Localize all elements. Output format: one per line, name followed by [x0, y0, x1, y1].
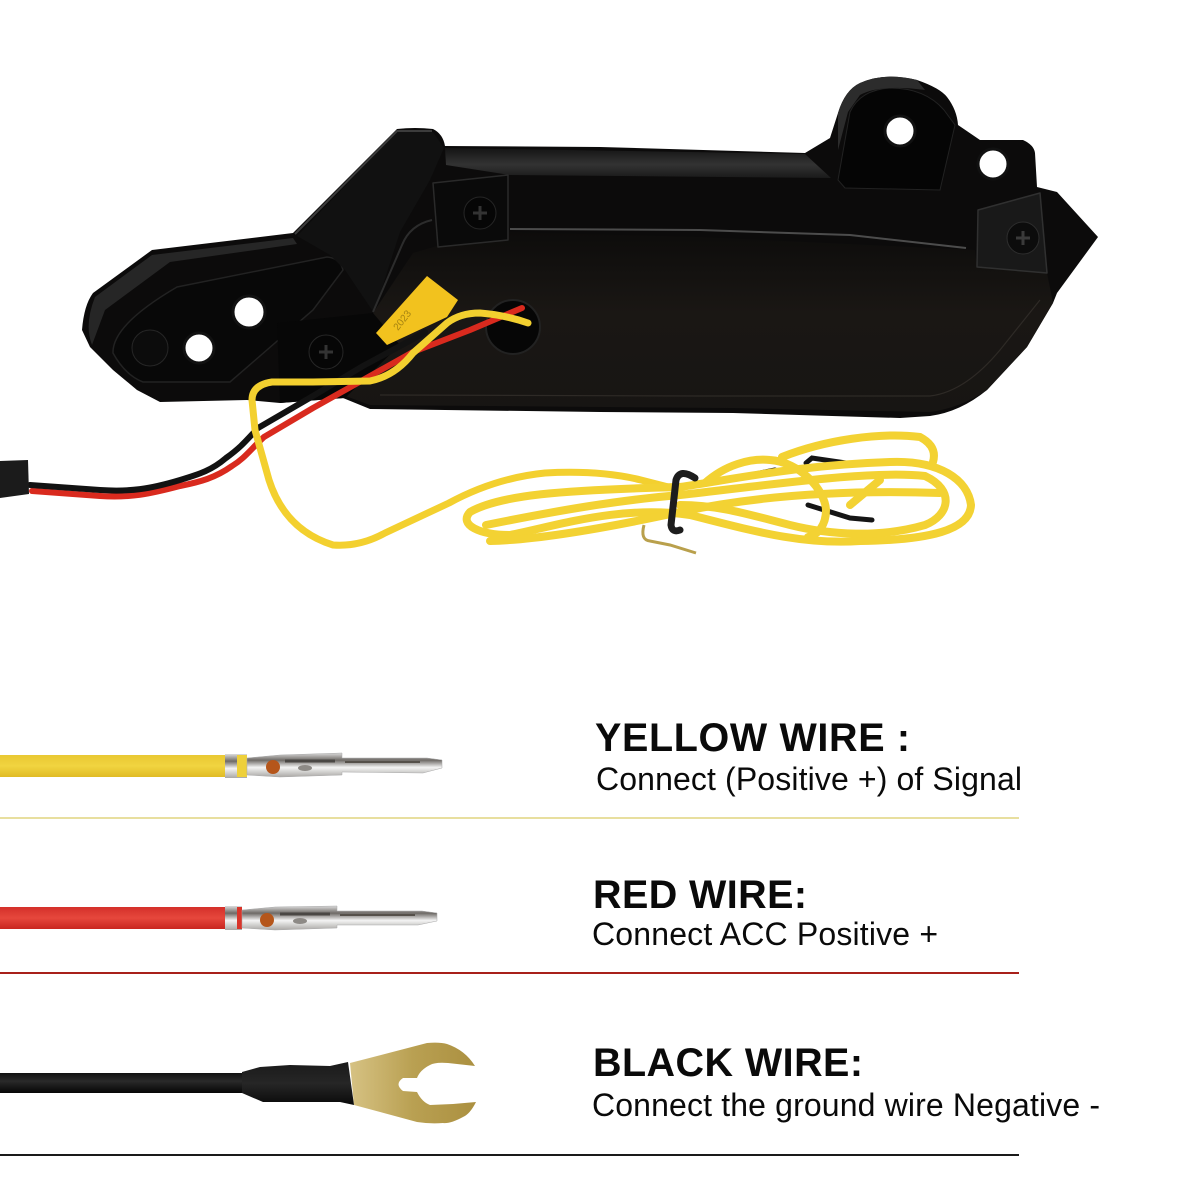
lower screw: [309, 335, 343, 369]
yellow wire heading: YELLOW WIRE :: [595, 716, 910, 760]
black wire in coil: [735, 458, 872, 520]
housing silhouette: [82, 77, 1098, 418]
yellow wire terminal: [0, 753, 442, 778]
date on label: 2023: [392, 308, 414, 333]
red wire terminal: [0, 906, 437, 930]
upper right hole: [885, 116, 915, 146]
left hole one: [184, 333, 214, 363]
upper screw tab: [433, 175, 508, 247]
yellow wire run: [252, 313, 680, 545]
rubber band: [671, 473, 695, 531]
wire plug: [0, 460, 29, 498]
right screw tab: [977, 193, 1047, 273]
black and red twin wire: [30, 308, 522, 497]
right hole: [978, 149, 1008, 179]
upper diagonal rib: [297, 132, 444, 313]
top glossy band: [445, 148, 831, 178]
black wire description: Connect the ground wire Negative -: [592, 1087, 1100, 1123]
ledge highlight: [510, 229, 966, 248]
black divider: [0, 1154, 1019, 1156]
yellow divider: [0, 817, 1019, 819]
left hole two: [233, 296, 265, 328]
upper screw: [464, 197, 496, 229]
left outer sheen: [89, 238, 297, 345]
wire grommet: [486, 300, 540, 354]
black wire heading: BLACK WIRE:: [593, 1041, 863, 1085]
coiled yellow wire: [467, 436, 971, 542]
red wire description: Connect ACC Positive +: [592, 916, 938, 952]
red divider: [0, 972, 1019, 974]
yellow label: [376, 276, 458, 345]
product: light housing with wires: [0, 77, 1098, 553]
small coil terminal: [643, 525, 696, 553]
right screw: [1007, 222, 1039, 254]
blind hole ring: [132, 330, 168, 366]
main lens panel: [343, 232, 1053, 412]
rib edge highlight: [295, 131, 432, 234]
lower screw tab: [277, 313, 400, 403]
yellow wire description: Connect (Positive +) of Signal: [596, 761, 1022, 797]
black wire spade terminal: [0, 1043, 476, 1123]
left plate: [113, 257, 343, 382]
inner panel line: [380, 300, 1040, 396]
red wire heading: RED WIRE:: [593, 873, 807, 917]
rib inner step: [373, 220, 432, 312]
ear sheen: [838, 77, 925, 150]
mounting ear: [838, 88, 955, 190]
